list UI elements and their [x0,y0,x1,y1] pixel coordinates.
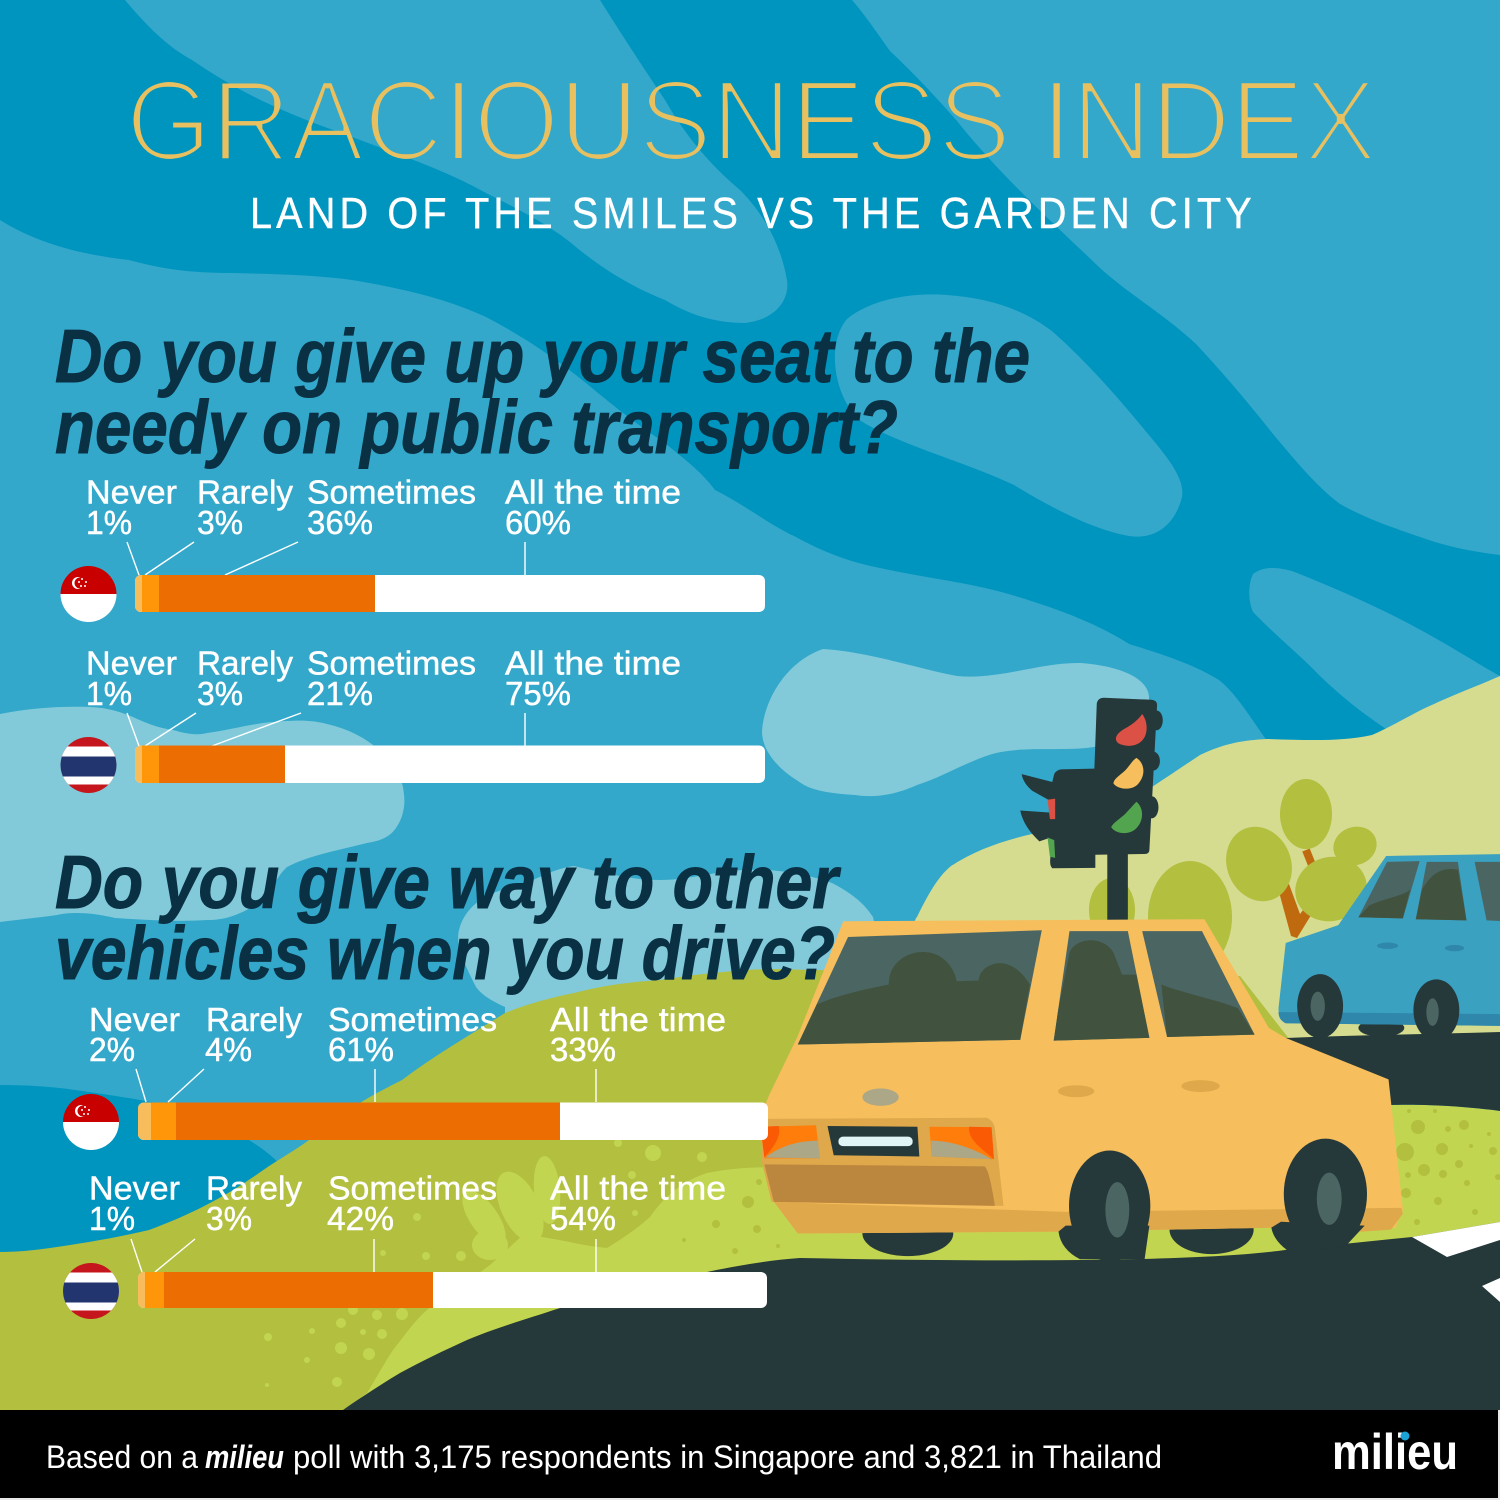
labels: All the time [550,1001,726,1038]
labels: Never [89,1170,180,1206]
labels: Rarely [206,1170,303,1206]
labels: 33% [550,1031,616,1068]
labels: Never [86,474,177,510]
background: pale hill [900,676,1500,1040]
leader lines [131,1239,596,1272]
labels: 54% [550,1200,616,1237]
labels: 42% [327,1200,394,1237]
source note: milieu [205,1439,284,1475]
logo: milieu: milieu [1332,1424,1458,1480]
leader lines [127,542,525,575]
labels: Rarely [197,474,294,510]
labels: 21% [307,675,373,712]
road [343,1032,1500,1410]
labels: 3% [206,1200,252,1237]
labels: 3% [197,675,243,712]
labels: 1% [86,675,132,712]
icon: yellow car [760,919,1403,1261]
labels: Never [86,644,177,682]
labels [89,1001,726,1068]
chart row: Thailand driving [63,1170,767,1319]
stacked bar [138,1102,768,1140]
icon: Singapore flag [60,566,117,622]
panel: question 1 [55,314,1030,793]
labels: Sometimes [307,474,476,510]
labels: 1% [86,504,132,541]
icon: traffic light [1020,698,1163,921]
icon: Thailand flag [60,737,117,793]
stacked bar [138,1272,767,1308]
heading: question 2: vehicles when you drive? [55,911,835,995]
footer [0,1410,1500,1500]
labels: 61% [328,1031,394,1068]
stacked bar [135,746,765,783]
source note: Based on a [46,1439,198,1475]
heading: question 1: Do you give up your seat to the [55,314,1030,398]
icon: blue car [1279,854,1500,1041]
labels: 60% [505,504,571,541]
labels: 3% [197,504,243,541]
labels: All the time [550,1170,726,1206]
background: olive hill [0,969,1300,1420]
labels: 75% [505,675,571,712]
leader lines [127,713,525,746]
title: GRACIOUSNESS INDEX [126,58,1377,185]
heading: question 1 [55,314,1030,469]
heading: question 2: Do you give way to other [55,840,841,924]
stacked bar [135,575,765,612]
labels: Sometimes [328,1001,497,1038]
background: light green verge [264,1105,1500,1410]
chart row: Singapore seat [60,474,765,622]
icon: Thailand flag [63,1263,120,1319]
chart row: Singapore driving [63,1001,768,1150]
subtitle: LAND OF THE SMILES VS THE GARDEN CITY [250,188,1252,237]
heading: question 2 [55,840,841,995]
labels: Rarely [206,1001,303,1038]
heading: question 1: needy on public transport? [55,385,898,469]
leader lines [136,1069,596,1102]
icon: Singapore flag [63,1094,120,1150]
labels: Rarely [197,644,294,682]
labels: All the time [505,644,681,682]
labels: 4% [205,1031,252,1068]
source note: poll with 3,175 respondents in Singapore and 3,821 in Thailand [293,1439,1162,1475]
labels: Never [89,1001,180,1038]
labels [86,644,681,712]
labels [86,474,681,541]
labels: Sometimes [328,1170,497,1206]
labels: Sometimes [307,644,476,682]
labels: 1% [89,1200,135,1237]
panel: question 2 [55,840,841,1319]
labels: 2% [89,1031,135,1068]
labels: All the time [505,474,681,510]
labels: 36% [307,504,373,541]
trees [1089,779,1382,973]
labels [89,1170,726,1237]
chart row: Thailand seat [60,644,765,793]
